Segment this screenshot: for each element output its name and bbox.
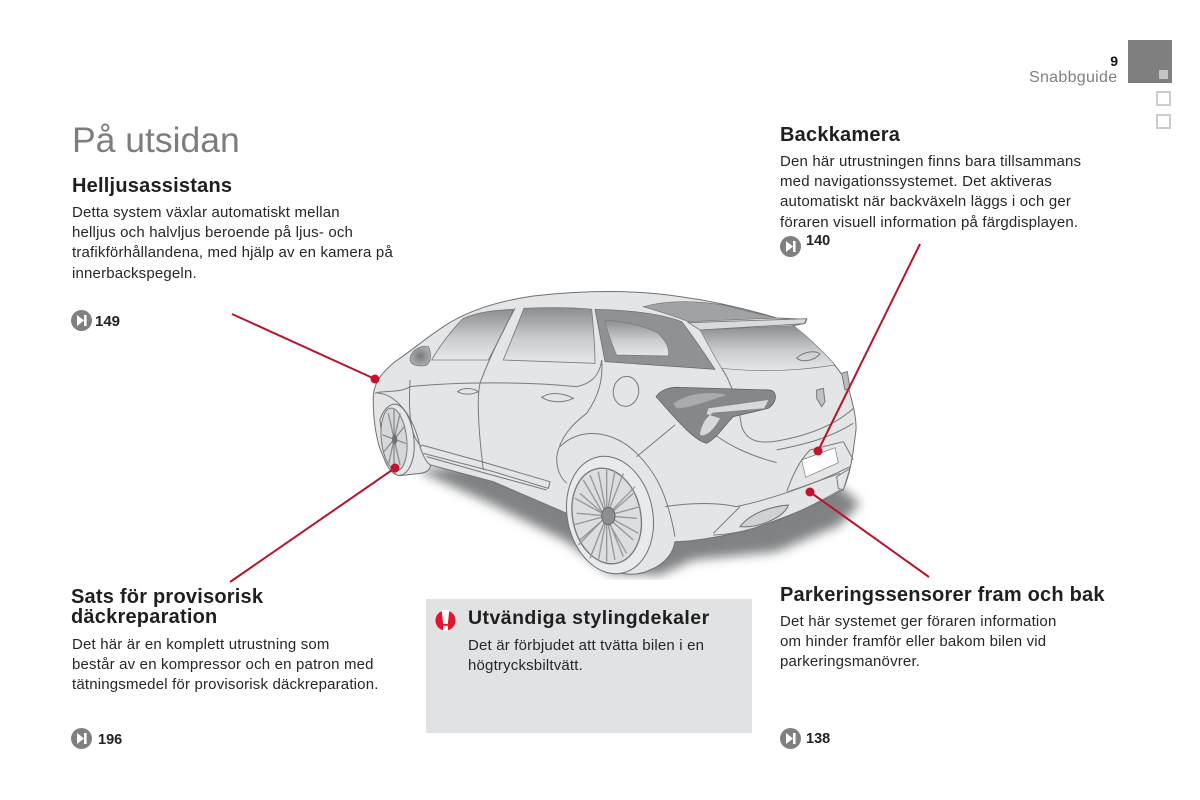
- text block: Parkeringssensorer: parkeringsmanövrer.: [780, 653, 920, 670]
- tail light: [656, 387, 775, 443]
- warning text: Det är förbjudet att tvätta bilen i en: [468, 637, 704, 654]
- reference: 140: 140: [806, 233, 830, 249]
- icon: warning: [436, 610, 456, 631]
- title: På utsidan: [72, 120, 240, 160]
- text block: Helljusassistans: trafikförhållandena, med hjälp av en kamera på: [72, 244, 393, 261]
- text block: Helljusassistans: Detta system växlar automatiskt mellan: [72, 204, 340, 221]
- text block: Sats för provisorisk däckreparation: Sats för provisorisk: [71, 586, 263, 608]
- car body: [373, 292, 856, 574]
- text block: Backkamera: [780, 124, 1081, 231]
- body lines: [375, 308, 853, 537]
- door handles and fuel cap: [458, 352, 850, 408]
- text block: Parkeringssensorer: om hinder framför eller bakom bilen vid: [780, 633, 1046, 650]
- reference: 149: [71, 310, 120, 331]
- car illustration: [372, 291, 864, 580]
- spoiler: [688, 319, 807, 330]
- text block: Parkeringssensorer: Det här systemet ger föraren information: [780, 613, 1056, 630]
- callout: reversing camera: [814, 244, 920, 456]
- text block: Parkeringssensorer: Parkeringssensorer fram och bak: [780, 584, 1105, 606]
- text block: Helljusassistans: innerbackspegeln.: [72, 265, 197, 282]
- text block: Helljusassistans: Helljusassistans: [72, 175, 232, 197]
- text block: Sats för provisorisk däckreparation: består av en kompressor och en patron med: [72, 656, 374, 673]
- reference: 196: 196: [98, 732, 122, 748]
- mirror: [410, 346, 431, 366]
- reference: 196: [71, 728, 122, 749]
- text block: Backkamera: med navigationssystemet. Det aktiveras: [780, 173, 1052, 190]
- rear pillar: [595, 309, 715, 369]
- front side window: [432, 309, 513, 360]
- page number: 9: [1110, 53, 1118, 69]
- rear wheel: [556, 448, 664, 582]
- reference: 140: [780, 233, 830, 257]
- text block: Backkamera: Den här utrustningen finns bara tillsammans: [780, 153, 1081, 170]
- navigation tabs: [1128, 40, 1172, 129]
- text block: Sats för provisorisk däckreparation: däckreparation: [71, 606, 217, 628]
- rear side window: [503, 308, 595, 363]
- callout: parking sensors: [806, 488, 929, 577]
- section label: Snabbguide: [1029, 69, 1117, 86]
- text block: Backkamera: automatiskt när backväxeln läggs i och ger: [780, 193, 1071, 210]
- callout: headlight: [232, 314, 380, 384]
- rear quarter window: [605, 320, 669, 356]
- roof panel: [643, 302, 777, 322]
- text block: Sats för provisorisk däckreparation: Det här är en komplett utrustning som: [72, 636, 330, 653]
- reference: 138: 138: [806, 731, 830, 747]
- warning heading: Utvändiga stylingdekaler: [468, 607, 710, 629]
- rear window: [700, 326, 835, 371]
- reference: 149: 149: [95, 313, 120, 330]
- text block: Backkamera: föraren visuell information på färgdisplayen.: [780, 214, 1078, 231]
- callout: repair kit: [230, 464, 400, 582]
- front wheel: [378, 404, 414, 475]
- text block: Sats för provisorisk däckreparation: tätningsmedel för provisorisk däckreparation.: [72, 676, 379, 693]
- warning text: [468, 637, 704, 674]
- text block: Helljusassistans: helljus och halvljus beroende på ljus- och: [72, 224, 353, 241]
- text block: Sats för provisorisk däckreparation: [71, 586, 379, 693]
- text block: Helljusassistans: [72, 175, 393, 282]
- text block: Parkeringssensorer: [780, 584, 1105, 670]
- panel: warning: [426, 599, 752, 733]
- ground shadow: [417, 447, 860, 575]
- text block: Backkamera: Backkamera: [780, 124, 900, 146]
- license plate: [802, 448, 838, 477]
- exhaust: [740, 505, 788, 527]
- warning text: högtrycksbiltvätt.: [468, 657, 583, 674]
- reference: 138: [780, 728, 830, 749]
